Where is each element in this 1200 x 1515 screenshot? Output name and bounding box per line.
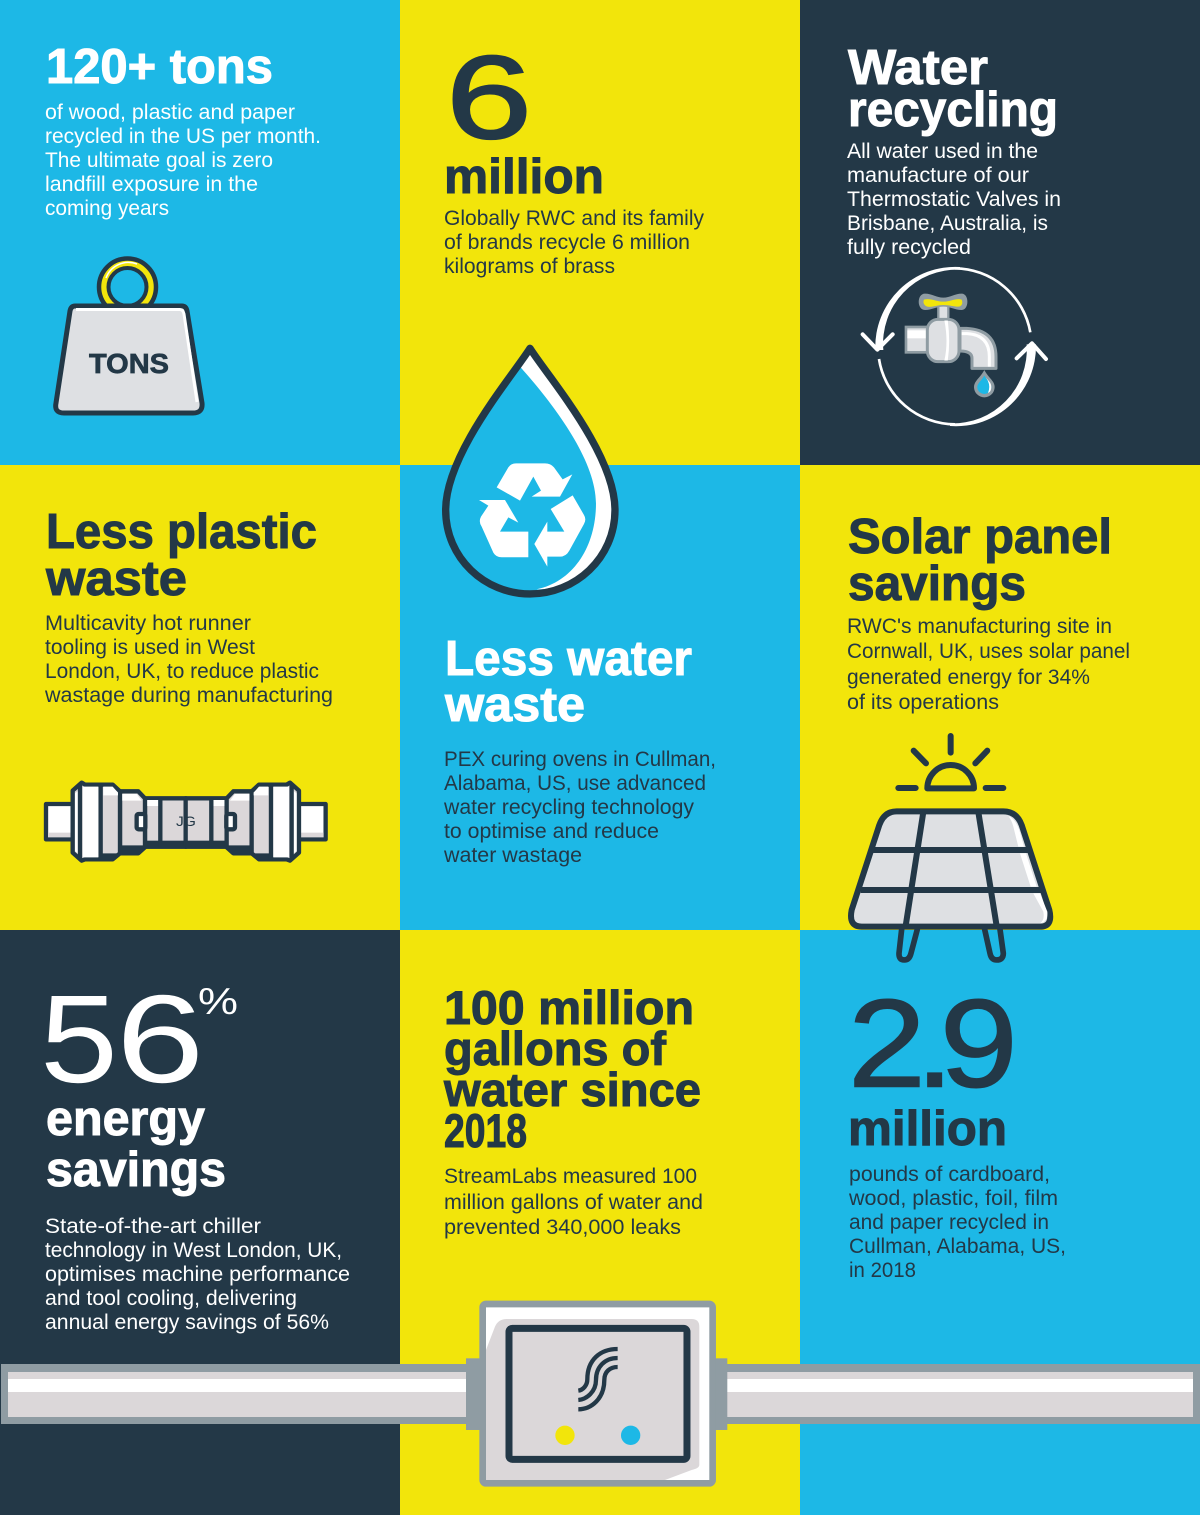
text: brass description: Globally RWC and its family (444, 207, 704, 230)
text: energy description: annual energy savings of 56% (45, 1311, 329, 1334)
text: water waste description: PEX curing ovens in Cullman, (444, 748, 716, 771)
text: plastic description: London, UK, to reduce plastic (45, 660, 319, 683)
text: cardboard description (848, 1163, 1066, 1282)
text: energy description: State-of-the-art chiller (45, 1215, 261, 1238)
panel: less plastic waste (0, 465, 400, 930)
text: StreamLabs description: million gallons of water and (444, 1191, 703, 1214)
text: water recycling description: fully recycled (847, 236, 971, 259)
heading: less water waste: waste (444, 678, 585, 732)
icon: tons weight: TONS (89, 348, 169, 379)
text: plastic description: wastage during manufacturing (44, 684, 333, 707)
heading: less plastic waste (45, 505, 317, 606)
number: 56: 6 (116, 970, 204, 1109)
text: plastic description: tooling is used in West (45, 636, 255, 659)
text: cardboard description: pounds of cardboard, (849, 1163, 1050, 1186)
text: solar description: Cornwall, UK, uses solar panel (847, 640, 1130, 663)
text: cardboard description: Cullman, Alabama, US, (849, 1235, 1066, 1258)
heading: solar panel savings: Solar panel (848, 510, 1112, 564)
panel: solar panel savings (800, 465, 1200, 960)
heading: 100 million gallons of water since 2018: 100 million (444, 981, 694, 1034)
heading: energy savings: energy (46, 1092, 205, 1146)
icon: tons weight (56, 258, 202, 413)
panel: 56% energy savings (0, 930, 400, 1515)
text: tons description: of wood, plastic and paper (45, 101, 295, 124)
text: water waste description: to optimise and reduce (444, 820, 659, 843)
text: tons description: landfill exposure in the (45, 173, 258, 196)
panel: 2.9 million (800, 930, 1200, 1515)
text: water waste description: Alabama, US, use advanced (444, 772, 706, 795)
text: cardboard description: and paper recycled in (849, 1211, 1049, 1234)
icon: sun and solar panel (851, 736, 1050, 960)
heading: solar panel savings (848, 510, 1112, 611)
heading: million: million (444, 150, 604, 204)
pipe: right section (726, 1364, 1200, 1424)
text: tons description: The ultimate goal is zero (45, 149, 273, 172)
text: plastic description (44, 612, 333, 707)
heading: water recycling: recycling (848, 83, 1058, 137)
heading: energy savings: savings (46, 1143, 226, 1197)
text: tons description: coming years (45, 197, 169, 220)
heading: less plastic waste: Less plastic (46, 505, 317, 559)
heading: less plastic waste: waste (45, 552, 187, 606)
text: water waste description (443, 748, 716, 867)
heading: less water waste: Less water (445, 632, 692, 686)
number: 6: 6 (446, 32, 532, 164)
icon: pipe fitting: JG (176, 813, 196, 829)
text: solar description: of its operations (847, 691, 999, 714)
icon: StreamLabs water meter (466, 1304, 727, 1483)
panel: 100 million gallons (400, 930, 800, 1515)
number: 56 (40, 970, 204, 1109)
panel: less water waste (400, 348, 800, 930)
text: water recycling description: Brisbane, Australia, is (847, 212, 1048, 235)
text: brass description: kilograms of brass (444, 255, 615, 278)
number: 56: 5 (40, 970, 118, 1109)
panel: 120+ tons (0, 0, 400, 465)
heading: less water waste (444, 632, 692, 732)
panel: 6 million (400, 0, 800, 465)
heading: 100 million gallons of water since 2018: 2018 (444, 1104, 527, 1157)
number: 2.9: 2.9 (848, 974, 1018, 1114)
heading: water recycling (848, 41, 1058, 137)
heading: million: million (848, 1102, 1007, 1156)
text: energy description: and tool cooling, delivering (45, 1287, 297, 1310)
text: solar description (847, 615, 1130, 714)
text: water waste description: water recycling technology (443, 796, 694, 819)
text: solar description: RWC's manufacturing site in (847, 615, 1112, 638)
percent sign: % (198, 981, 238, 1022)
icon: pipe fitting (46, 783, 326, 861)
text: energy description: optimises machine performance (45, 1263, 350, 1286)
text: StreamLabs description (444, 1165, 703, 1239)
text: brass description: of brands recycle 6 million (444, 231, 690, 254)
text: StreamLabs description: prevented 340,000 leaks (444, 1216, 681, 1239)
heading: 100 million gallons of water since 2018: gallons of (444, 1022, 666, 1075)
text: plastic description: Multicavity hot runner (45, 612, 251, 635)
text: cardboard description: wood, plastic, foil, film (848, 1187, 1058, 1210)
text: solar description: generated energy for 34% (847, 666, 1090, 689)
text: StreamLabs description: StreamLabs measured 100 (444, 1165, 697, 1188)
text: water waste description: water wastage (443, 844, 582, 867)
text: brass description (444, 207, 704, 278)
text: tons description (45, 101, 321, 220)
text: water recycling description: manufacture of our (847, 164, 1029, 187)
heading: 120+ tons: 120+ tons (46, 40, 273, 94)
heading: solar panel savings: savings (848, 557, 1026, 611)
icon: recycling tap (863, 267, 1046, 426)
pipe: left section (1, 1364, 468, 1424)
panel: water recycling (800, 0, 1200, 465)
text: water recycling description: Thermostatic Valves in (847, 188, 1061, 211)
text: cardboard description: in 2018 (849, 1259, 916, 1282)
text: energy description: technology in West London, UK, (45, 1239, 342, 1262)
heading: 100 million gallons of water since 2018: water since (443, 1063, 701, 1116)
text: water recycling description (847, 140, 1061, 259)
text: energy description (45, 1215, 350, 1334)
heading: 100 million gallons of water since 2018 (443, 981, 701, 1157)
text: water recycling description: All water used in the (847, 140, 1038, 163)
heading: water recycling: Water (848, 41, 988, 95)
icon: water drop with recycling symbol (446, 348, 615, 594)
text: tons description: recycled in the US per month. (45, 125, 321, 148)
heading: energy savings (46, 1092, 226, 1197)
